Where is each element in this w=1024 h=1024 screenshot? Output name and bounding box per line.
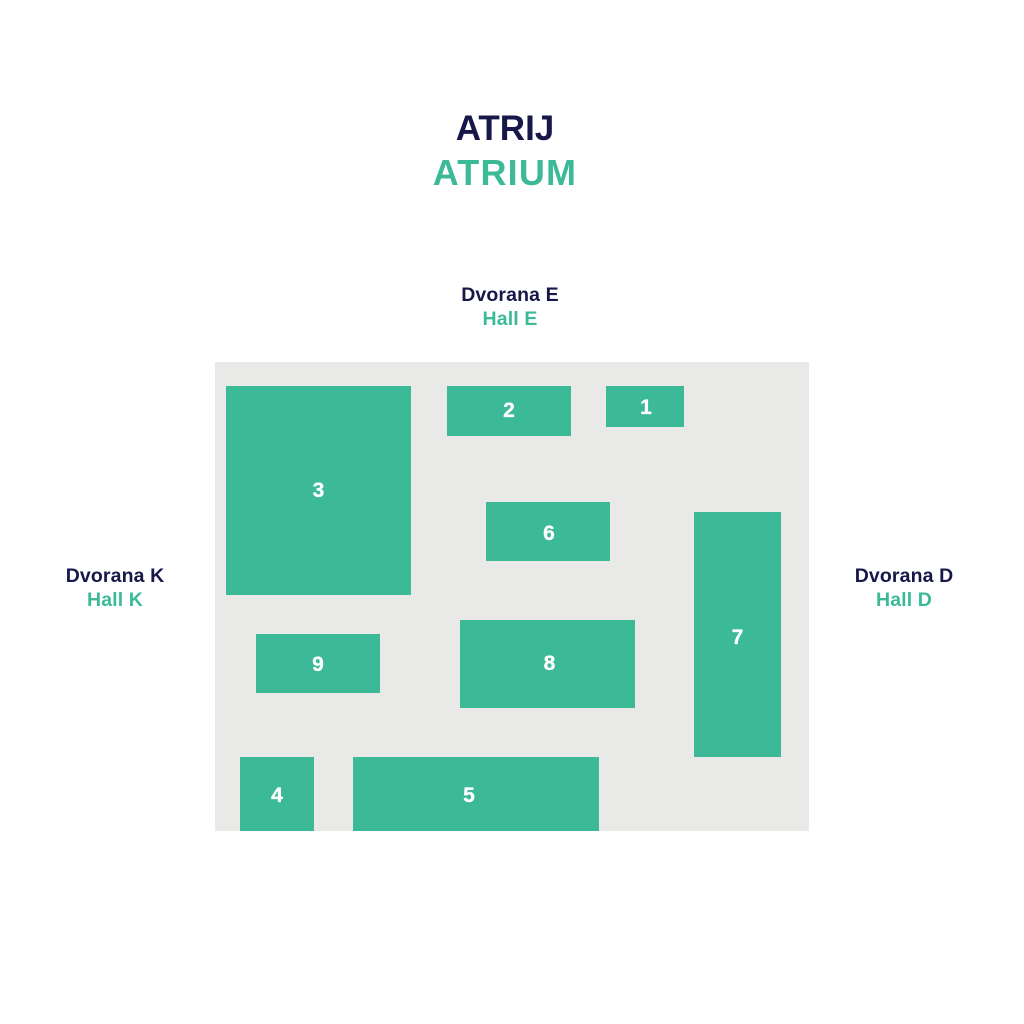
booth 3 — [226, 386, 411, 595]
title: ATRIJ — [456, 109, 554, 148]
booth 7: 7 — [732, 626, 743, 649]
booth 9 — [256, 634, 380, 693]
booth 6 — [486, 502, 610, 561]
booth 4 — [240, 757, 314, 831]
booth 8 — [460, 620, 635, 708]
label: hall K: Dvorana K — [66, 565, 164, 587]
booth 5 — [353, 757, 599, 831]
booth 6: 6 — [543, 522, 555, 545]
panel: floor plan — [215, 362, 809, 831]
label: hall D: Hall D — [876, 589, 932, 611]
booth 1: 1 — [640, 396, 652, 418]
booth 1 — [606, 386, 684, 427]
booth 7 — [694, 512, 781, 757]
title: ATRIUM — [433, 152, 577, 193]
title — [433, 109, 577, 193]
label: hall K: Hall K — [87, 589, 143, 611]
booth 8: 8 — [544, 652, 555, 675]
booth 2: 2 — [503, 399, 515, 422]
label: hall E: Dvorana E — [461, 284, 559, 306]
label: hall K — [66, 565, 164, 611]
booth 5: 5 — [463, 784, 475, 807]
label: hall E — [461, 284, 559, 330]
booth 2 — [447, 386, 571, 436]
booth 9: 9 — [312, 653, 324, 676]
booth 4: 4 — [271, 784, 283, 807]
label: hall E: Hall E — [483, 308, 537, 330]
label: hall D: Dvorana D — [855, 565, 953, 587]
label: hall D — [855, 565, 953, 611]
booth 3: 3 — [313, 478, 324, 502]
